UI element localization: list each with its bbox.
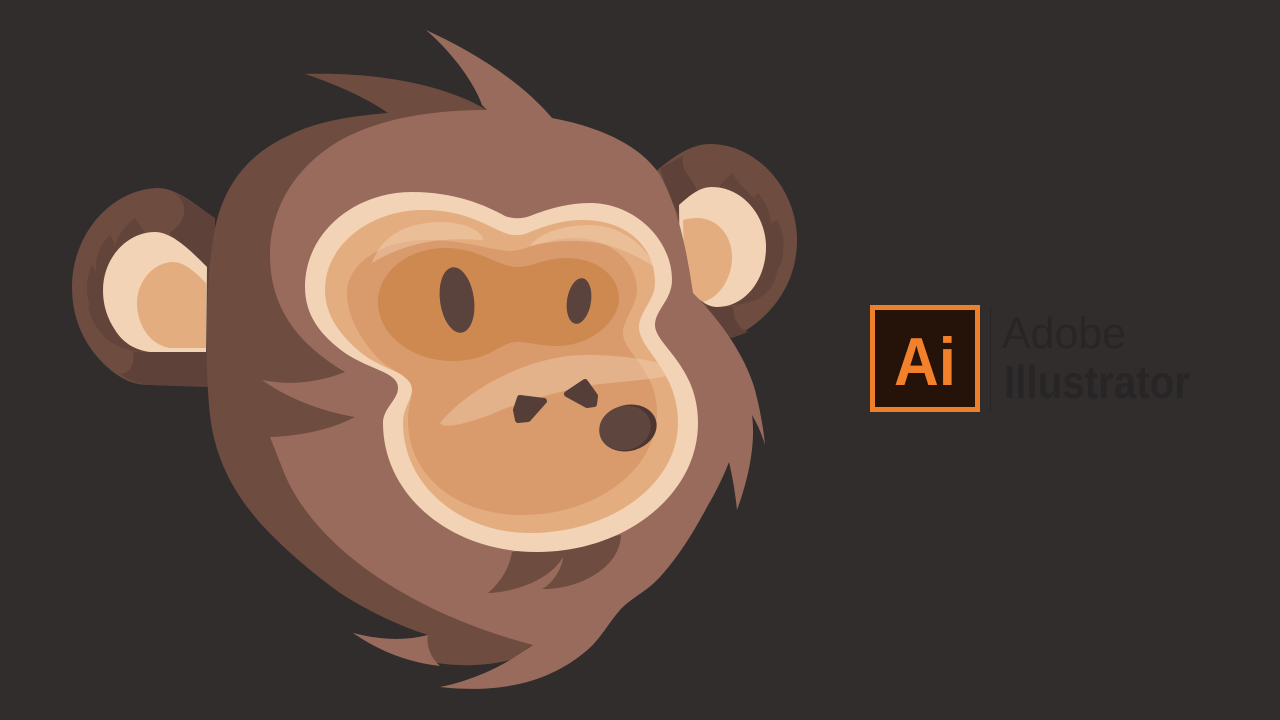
lighter fur strip on lower tuft <box>353 633 440 666</box>
wordmark: Illustrator: Illustrator <box>1004 356 1190 408</box>
icon: mouth <box>594 398 662 458</box>
face outline <box>305 192 698 552</box>
wordmark: Adobe: Adobe <box>1002 309 1126 358</box>
logo: Adobe Illustrator <box>872 307 1190 412</box>
eye patch <box>378 248 619 361</box>
icon: left nostril <box>516 398 544 420</box>
icon: right eye <box>564 276 594 326</box>
divider <box>990 307 991 412</box>
head shadow side <box>207 74 540 665</box>
right brow highlight <box>530 225 655 267</box>
face skin <box>325 210 678 533</box>
head main fur <box>262 30 765 689</box>
icon: right nostril <box>567 382 595 405</box>
muzzle highlight <box>440 355 673 426</box>
face mid tone <box>347 238 657 515</box>
Ai letters: Ai <box>894 324 956 400</box>
left brow highlight <box>372 222 483 263</box>
icon: right ear <box>655 144 797 338</box>
chin fur marks <box>488 535 621 593</box>
icon: Ai badge <box>872 308 978 410</box>
icon: left eye <box>436 265 478 335</box>
monkey head illustration <box>72 30 797 689</box>
icon: left ear <box>72 188 215 387</box>
